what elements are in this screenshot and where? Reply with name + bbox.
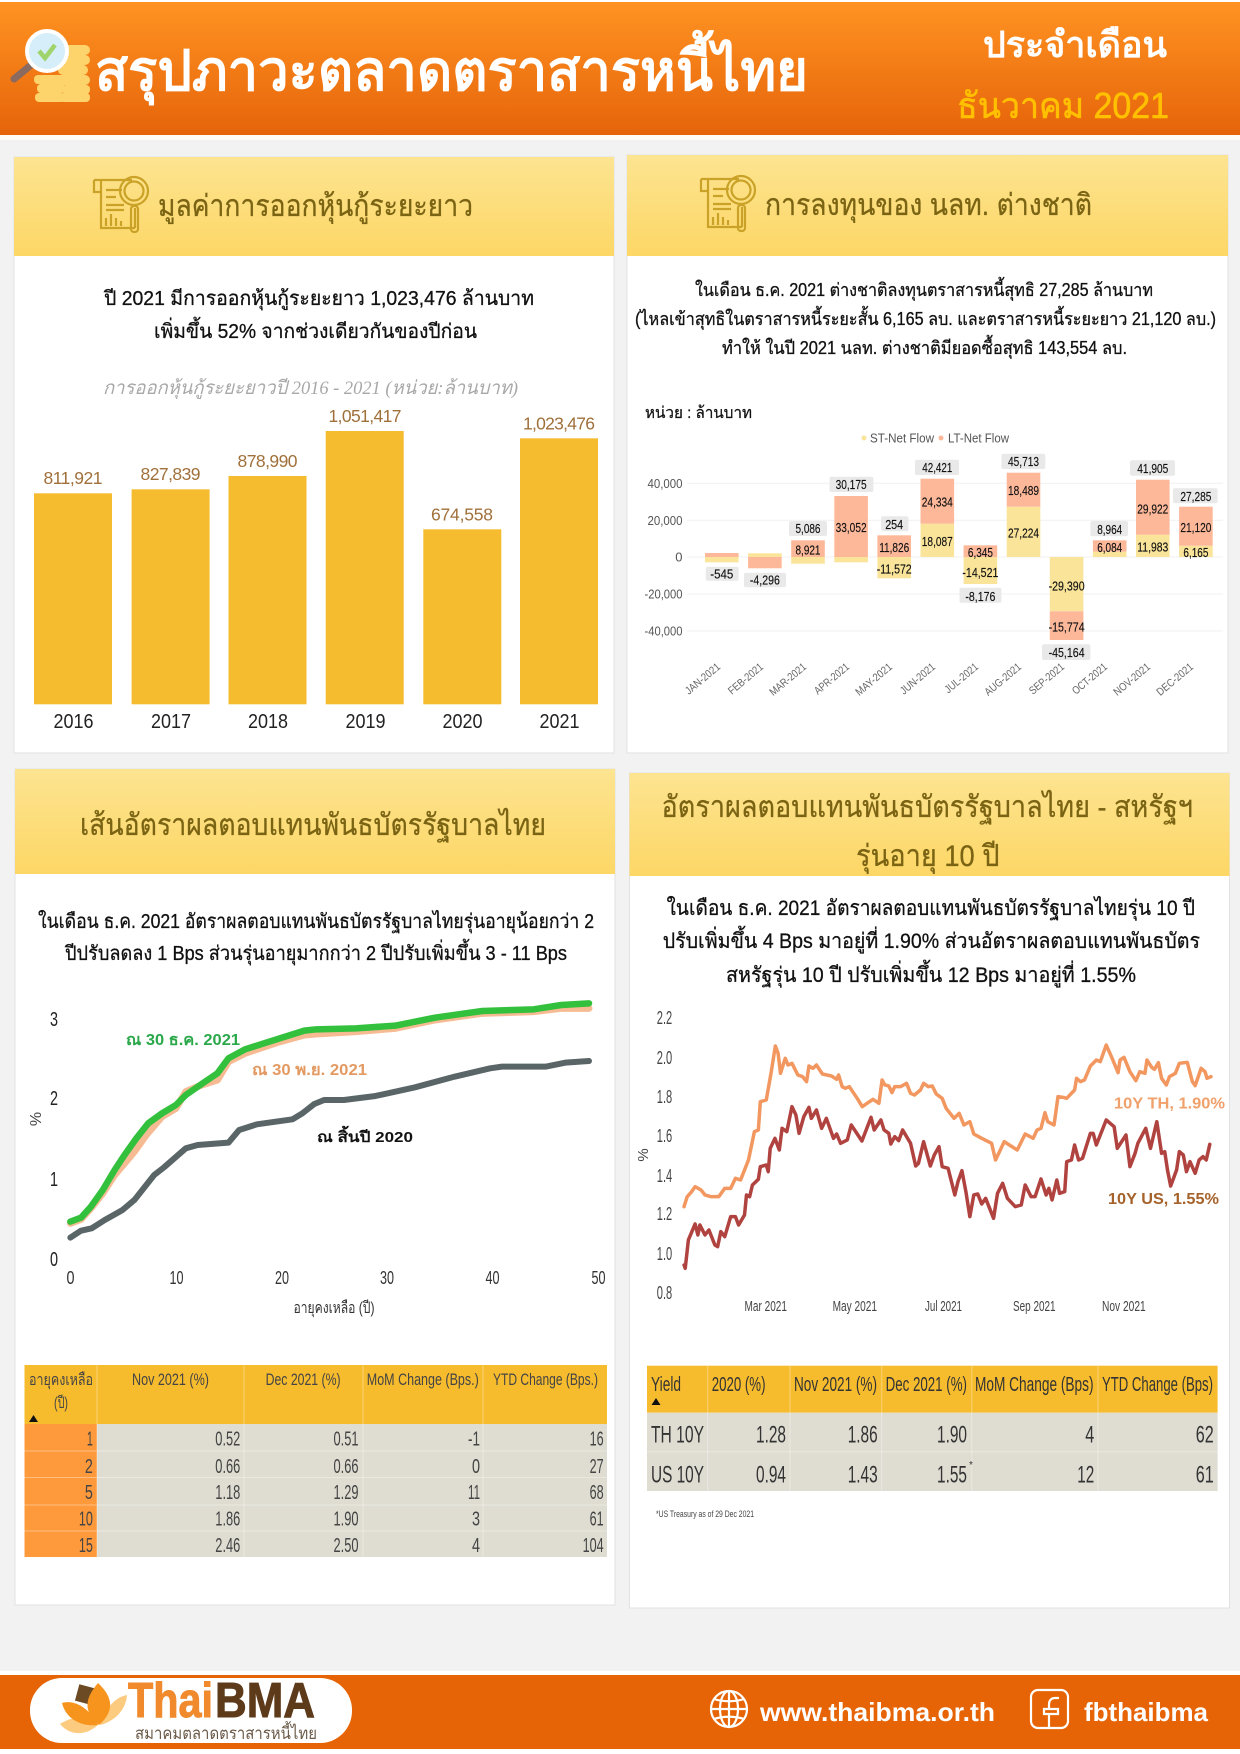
table: yield by remaining maturity: 11 bbox=[468, 1482, 480, 1504]
footer bar bbox=[0, 1671, 1240, 1754]
stacked bar chart: monthly net flows: 20,000 bbox=[648, 513, 682, 528]
summary text: ปรับเพิ่มขึ้น 4 Bps มาอยู่ที่ 1.90% ส่วนอัตราผลตอบแทนพันธบัตร bbox=[663, 926, 1200, 954]
stacked bar chart: monthly net flows: 29,922 bbox=[1137, 501, 1168, 516]
stacked bar chart: monthly net flows: MAR-2021 bbox=[768, 661, 809, 699]
line chart: 10-year yields: 1.0 bbox=[657, 1244, 672, 1264]
logo: ThaiBMA: BMA bbox=[215, 1674, 315, 1728]
line chart: yield curve: 20 bbox=[275, 1268, 289, 1288]
table: yield by remaining maturity: -1 bbox=[468, 1428, 480, 1450]
summary text: ในเดือน ธ.ค. 2021 อัตราผลตอบแทนพันธบัตรรัฐบาลไทยรุ่น 10 ปี bbox=[667, 896, 1195, 921]
stacked bar chart: monthly net flows: MAY-2021 bbox=[854, 661, 895, 699]
stacked bar chart: monthly net flows: 6,345 bbox=[968, 545, 993, 560]
page header banner bbox=[0, 0, 1240, 140]
line chart: yield curve: % bbox=[28, 1112, 45, 1126]
stacked bar chart: monthly net flows: -40,000 bbox=[644, 624, 682, 638]
stacked bar chart: monthly net flows: 30,175 bbox=[836, 477, 867, 492]
stacked bar chart: monthly net flows: 8,921 bbox=[796, 543, 820, 558]
series label: Dec 2021: ณ 30 ธ.ค. 2021 bbox=[126, 1032, 240, 1049]
bar chart: issuance by year: 1,023,476 bbox=[523, 414, 595, 434]
stacked bar chart: monthly net flows: -545 bbox=[710, 566, 733, 582]
line chart: yield curve: 50 bbox=[592, 1268, 606, 1288]
stacked bar chart: monthly net flows: 27,224 bbox=[1008, 526, 1039, 541]
table: yield by remaining maturity: 2.46 bbox=[215, 1535, 240, 1557]
table: 10-year yield comparison: 1.90 bbox=[937, 1422, 967, 1448]
stacked bar chart: monthly net flows: 6,084 bbox=[1097, 540, 1122, 555]
table: yield by remaining maturity: 61 bbox=[590, 1508, 604, 1530]
series label: end 2020: ณ สิ้นปี 2020 bbox=[317, 1125, 413, 1146]
line chart: 10-year yields: 1.2 bbox=[657, 1204, 672, 1224]
table: 10-year yield comparison: 0.94 bbox=[756, 1462, 786, 1488]
summary text: สหรัฐรุ่น 10 ปี ปรับเพิ่มขึ้น 12 Bps มาอยู่ที่ 1.55% bbox=[726, 960, 1136, 988]
stacked bar chart: monthly net flows: 27,285 bbox=[1180, 489, 1211, 504]
stacked bar chart: monthly net flows: -15,774 bbox=[1049, 620, 1085, 635]
bar chart: issuance by year: 2021 bbox=[540, 711, 580, 733]
bar chart: issuance by year: 674,558 bbox=[431, 504, 493, 524]
table: yield by remaining maturity: 0 bbox=[472, 1456, 480, 1478]
summary text: ในเดือน ธ.ค. 2021 อัตราผลตอบแทนพันธบัตรรัฐบาลไทยรุ่นอายุน้อยกว่า 2 bbox=[38, 910, 594, 934]
stacked bar chart: monthly net flows: 0 bbox=[675, 550, 682, 564]
unit label: หน่วย : ล้านบาท bbox=[645, 404, 752, 422]
stacked bar chart: monthly net flows: 18,087 bbox=[922, 534, 953, 549]
line chart: 10-year yields bbox=[635, 1008, 1225, 1315]
table: yield by remaining maturity: 68 bbox=[590, 1482, 604, 1504]
bar chart: issuance by year: 2016 bbox=[54, 711, 94, 733]
line chart: 10-year yields: 1.4 bbox=[657, 1166, 672, 1186]
heading: มูลค่าการออกหุ้นกู้ระยะยาว bbox=[158, 190, 473, 225]
series label: 10Y US: 10Y US, 1.55% bbox=[1108, 1191, 1219, 1208]
table: yield by remaining maturity: 27 bbox=[590, 1456, 604, 1478]
table: yield by remaining maturity: 0.66 bbox=[215, 1456, 240, 1478]
series label: Nov 2021: ณ 30 พ.ย. 2021 bbox=[252, 1062, 367, 1079]
summary text bbox=[38, 910, 594, 966]
line chart: 10-year yields: 1.8 bbox=[657, 1087, 672, 1107]
line chart: yield curve: 40 bbox=[486, 1268, 500, 1288]
line chart: 10-year yields: Nov 2021 bbox=[1102, 1298, 1146, 1315]
table: 10-year yield comparison: US 10Y bbox=[651, 1462, 704, 1488]
table: yield by remaining maturity: อายุคงเหลือ bbox=[29, 1371, 93, 1390]
table: yield by remaining maturity: Dec 2021 (%) bbox=[266, 1370, 341, 1389]
table: yield by remaining maturity: 5 bbox=[85, 1482, 93, 1504]
stacked bar chart: monthly net flows: -45,164 bbox=[1049, 645, 1085, 660]
stacked bar chart: monthly net flows: 11,983 bbox=[1137, 540, 1168, 555]
line chart: 10-year yields: 1.6 bbox=[657, 1126, 672, 1146]
website: www.thaibma.or.th bbox=[759, 1697, 995, 1727]
heading: อัตราผลตอบแทนพันธบัตรรัฐบาลไทย - สหรัฐฯ bbox=[662, 789, 1193, 825]
stacked bar chart: monthly net flows: JUN-2021 bbox=[898, 661, 938, 697]
line chart: 10-year yields: 0.8 bbox=[657, 1283, 672, 1303]
stacked bar chart: monthly net flows: 21,120 bbox=[1180, 520, 1211, 535]
table: yield by remaining maturity: 2.50 bbox=[334, 1535, 358, 1557]
bar chart: issuance by year: 2019 bbox=[346, 711, 386, 733]
line chart: 10-year yields: May 2021 bbox=[833, 1298, 877, 1315]
stacked bar chart: monthly net flows: -20,000 bbox=[644, 586, 682, 602]
table: 10-year yield comparison: 61 bbox=[1196, 1462, 1214, 1488]
bar chart: issuance by year: 2020 bbox=[442, 711, 482, 733]
bar chart: issuance by year: 827,839 bbox=[140, 464, 200, 484]
stacked bar chart: monthly net flows: 40,000 bbox=[648, 476, 682, 491]
heading: รุ่นอายุ 10 ปี bbox=[856, 840, 1000, 875]
chart caption: การออกหุ้นกู้ระยะยาวปี 2016 - 2021 (หน่วย:ล้านบาท) bbox=[103, 377, 518, 399]
bar chart: issuance by year bbox=[34, 406, 598, 733]
line chart: yield curve: 2 bbox=[50, 1088, 58, 1110]
stacked bar chart: monthly net flows: AUG-2021 bbox=[983, 661, 1024, 699]
stacked bar chart: monthly net flows: 45,713 bbox=[1008, 454, 1039, 469]
table: 10-year yield comparison: 4 bbox=[1085, 1422, 1094, 1448]
stacked bar chart: monthly net flows: 11,826 bbox=[879, 540, 909, 555]
table: 10-year yield comparison bbox=[647, 1366, 1218, 1491]
summary text: เพิ่มขึ้น 52% จากช่วงเดียวกันของปีก่อน bbox=[154, 317, 477, 343]
table: 10-year yield comparison: MoM Change (Bps) bbox=[975, 1374, 1094, 1396]
panel: foreign investor flows bbox=[627, 155, 1228, 753]
panel: long-term debenture issuance bbox=[14, 157, 614, 753]
table: 10-year yield comparison: 1.28 bbox=[756, 1422, 786, 1448]
stacked bar chart: monthly net flows: APR-2021 bbox=[812, 661, 852, 697]
table: yield by remaining maturity: 0.66 bbox=[334, 1456, 358, 1478]
summary text: ในเดือน ธ.ค. 2021 ต่างชาติลงทุนตราสารหนี้สุทธิ 27,285 ล้านบาท bbox=[695, 277, 1153, 301]
heading: เส้นอัตราผลตอบแทนพันธบัตรรัฐบาลไทย bbox=[80, 807, 546, 843]
table: yield by remaining maturity: 1.86 bbox=[215, 1508, 240, 1530]
stacked bar chart: monthly net flows: -29,390 bbox=[1049, 578, 1085, 593]
table: 10-year yield comparison: 12 bbox=[1077, 1462, 1094, 1488]
table: yield by remaining maturity: 1.29 bbox=[334, 1482, 358, 1504]
stacked bar chart: monthly net flows: 18,489 bbox=[1008, 483, 1039, 498]
table: yield by remaining maturity: MoM Change (Bps.) bbox=[367, 1370, 479, 1389]
table: 10-year yield comparison: 1.86 bbox=[848, 1422, 878, 1448]
stacked bar chart: monthly net flows: OCT-2021 bbox=[1070, 661, 1110, 697]
line chart: yield curve: 10 bbox=[170, 1268, 184, 1288]
stacked bar chart: monthly net flows: 254 bbox=[885, 517, 903, 532]
stacked bar chart: monthly net flows: 5,086 bbox=[796, 521, 820, 536]
stacked bar chart: monthly net flows: -14,521 bbox=[962, 565, 998, 580]
table: 10-year yield comparison: 2020 (%) bbox=[712, 1374, 766, 1396]
stacked bar chart: monthly net flows: JUL-2021 bbox=[943, 661, 981, 696]
stacked bar chart: monthly net flows: -8,176 bbox=[965, 589, 995, 604]
legend bbox=[862, 430, 1010, 446]
line chart: 10-year yields: Jul 2021 bbox=[925, 1298, 962, 1315]
line chart: yield curve bbox=[28, 1003, 606, 1318]
table: 10-year yield comparison: Dec 2021 (%) bbox=[886, 1374, 967, 1396]
table: yield by remaining maturity: 0.52 bbox=[215, 1428, 240, 1450]
table: 10-year yield comparison: Nov 2021 (%) bbox=[794, 1374, 877, 1396]
line chart: yield curve: 30 bbox=[380, 1268, 394, 1288]
line chart: yield curve: 3 bbox=[50, 1009, 58, 1031]
line chart: 10-year yields: Sep 2021 bbox=[1013, 1298, 1056, 1315]
table: yield by remaining maturity: 1.18 bbox=[215, 1482, 240, 1504]
panel: Thai vs US 10-year yields bbox=[630, 773, 1230, 1608]
stacked bar chart: monthly net flows: 41,905 bbox=[1137, 461, 1168, 476]
table: yield by remaining maturity: Nov 2021 (%) bbox=[132, 1370, 209, 1389]
icon: report and magnifier bbox=[701, 176, 755, 231]
bar chart: issuance by year: 878,990 bbox=[238, 451, 298, 471]
bar chart: issuance by year: 2018 bbox=[248, 711, 288, 733]
table: yield by remaining maturity: 1.90 bbox=[334, 1508, 358, 1530]
table: 10-year yield comparison: * bbox=[969, 1460, 973, 1471]
table: yield by remaining maturity: 2 bbox=[85, 1456, 93, 1478]
stacked bar chart: monthly net flows: DEC-2021 bbox=[1155, 661, 1196, 699]
bar chart: issuance by year: 1,051,417 bbox=[328, 406, 402, 426]
icon: report and magnifier bbox=[94, 177, 148, 232]
icon: facebook bbox=[1031, 1690, 1068, 1728]
line chart: 10-year yields: Mar 2021 bbox=[744, 1298, 787, 1315]
stacked bar chart: monthly net flows: FEB-2021 bbox=[726, 661, 766, 697]
table: 10-year yield comparison: 62 bbox=[1196, 1422, 1214, 1448]
issue label: ประจำเดือน bbox=[983, 24, 1167, 65]
stacked bar chart: monthly net flows: JAN-2021 bbox=[683, 661, 723, 697]
logo: ThaiBMA: Thai bbox=[128, 1674, 213, 1728]
table: yield by remaining maturity: 15 bbox=[79, 1535, 93, 1557]
table: yield by remaining maturity: 104 bbox=[583, 1535, 604, 1557]
table: yield by remaining maturity: 10 bbox=[79, 1508, 93, 1530]
table: 10-year yield comparison: 1.55 bbox=[937, 1462, 967, 1488]
stacked bar chart: monthly net flows: SEP-2021 bbox=[1027, 661, 1067, 697]
logo: ThaiBMA bbox=[30, 1674, 352, 1743]
footnote: *US Treasury as of 29 Dec 2021 bbox=[656, 1509, 754, 1519]
summary text bbox=[663, 896, 1200, 988]
stacked bar chart: monthly net flows: 33,052 bbox=[836, 520, 867, 535]
stacked bar chart: monthly net flows: 6,165 bbox=[1183, 545, 1208, 560]
table: yield by remaining maturity bbox=[24, 1365, 607, 1557]
line chart: 10-year yields: % bbox=[635, 1148, 652, 1162]
table: yield by remaining maturity: 3 bbox=[472, 1508, 480, 1530]
table: yield by remaining maturity: YTD Change (Bps.) bbox=[493, 1370, 598, 1389]
summary text bbox=[635, 277, 1216, 359]
heading: การลงทุนของ นลท. ต่างชาติ bbox=[765, 189, 1092, 224]
legend: ST-Net Flow bbox=[870, 430, 935, 446]
stacked bar chart: monthly net flows: -4,296 bbox=[750, 572, 780, 588]
line chart: yield curve: 0 bbox=[66, 1268, 74, 1288]
issue month: ธันวาคม 2021 bbox=[957, 85, 1169, 126]
summary text: ปีปรับลดลง 1 Bps ส่วนรุ่นอายุมากกว่า 2 ปีปรับเพิ่มขึ้น 3 - 11 Bps bbox=[65, 939, 567, 966]
panel: Thai government bond yield curve bbox=[15, 769, 615, 1605]
table: 10-year yield comparison: TH 10Y bbox=[651, 1422, 704, 1448]
title: สรุปภาวะตลาดตราสารหนี้ไทย bbox=[95, 30, 808, 106]
logo: ThaiBMA: สมาคมตลาดตราสารหนี้ไทย bbox=[135, 1721, 317, 1743]
facebook page: fbthaibma bbox=[1084, 1697, 1209, 1727]
stacked bar chart: monthly net flows: 42,421 bbox=[922, 460, 952, 475]
table: yield by remaining maturity: 4 bbox=[472, 1535, 480, 1557]
line chart: 10-year yields: 2.2 bbox=[657, 1008, 672, 1028]
icon: globe bbox=[711, 1691, 747, 1727]
table: 10-year yield comparison: Yield bbox=[651, 1374, 681, 1396]
icon: magnifier and coins bbox=[14, 31, 90, 102]
line chart: yield curve: 1 bbox=[50, 1169, 58, 1191]
table: yield by remaining maturity: 0.51 bbox=[334, 1428, 358, 1450]
heading bbox=[662, 789, 1193, 875]
summary text: ปี 2021 มีการออกหุ้นกู้ระยะยาว 1,023,476 ล้านบาท bbox=[104, 288, 534, 311]
stacked bar chart: monthly net flows: NOV-2021 bbox=[1112, 661, 1153, 699]
summary text: ทำให้ ในปี 2021 นลท. ต่างชาติมียอดซื้อสุทธิ 143,554 ลบ. bbox=[722, 335, 1127, 359]
line chart: 10-year yields: 2.0 bbox=[657, 1048, 672, 1068]
stacked bar chart: monthly net flows: 8,964 bbox=[1097, 522, 1122, 537]
stacked bar chart: monthly net flows: 24,334 bbox=[922, 495, 953, 510]
bar chart: issuance by year: 811,921 bbox=[44, 468, 102, 488]
stacked bar chart: monthly net flows bbox=[644, 454, 1223, 699]
bar chart: issuance by year: 2017 bbox=[151, 711, 191, 733]
table: yield by remaining maturity: (ปี) bbox=[54, 1394, 68, 1412]
table: yield by remaining maturity: 1 bbox=[87, 1428, 93, 1450]
stacked bar chart: monthly net flows: -11,572 bbox=[877, 562, 912, 577]
series label: 10Y TH: 10Y TH, 1.90% bbox=[1114, 1096, 1225, 1112]
line chart: yield curve: อายุคงเหลือ (ปี) bbox=[294, 1299, 374, 1318]
legend: LT-Net Flow bbox=[948, 430, 1010, 446]
line chart: yield curve: 0 bbox=[50, 1249, 58, 1271]
table: yield by remaining maturity: 16 bbox=[590, 1428, 604, 1450]
summary text bbox=[104, 288, 534, 343]
table: 10-year yield comparison: 1.43 bbox=[848, 1462, 878, 1488]
